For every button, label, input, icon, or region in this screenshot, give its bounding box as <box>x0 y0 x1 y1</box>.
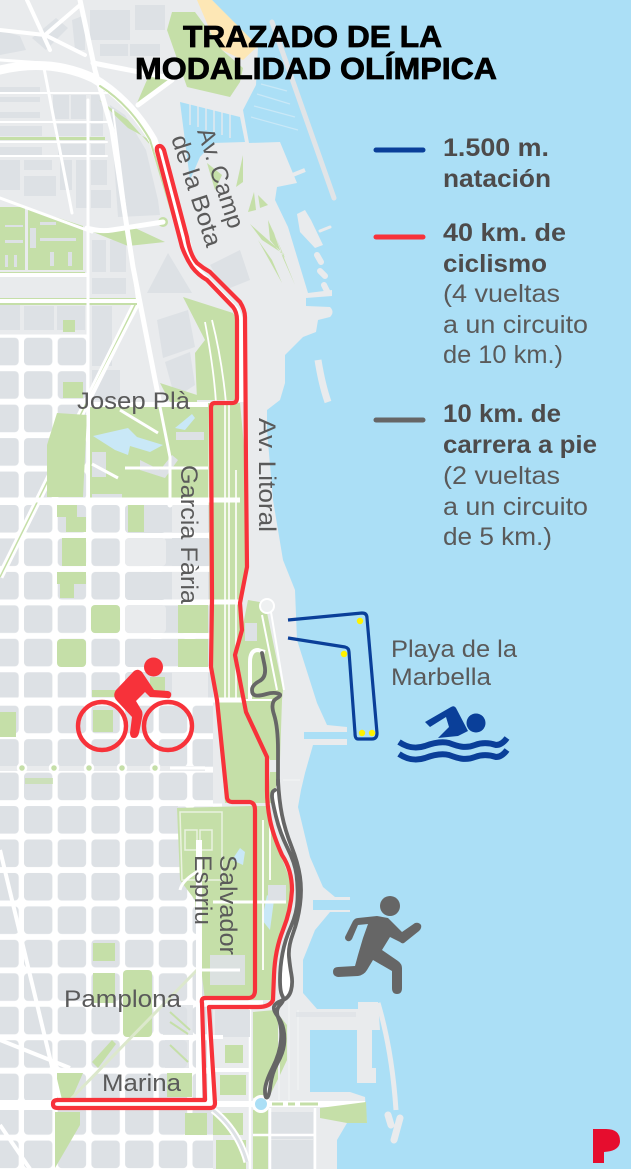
title: MODALIDAD OLÍMPICA <box>135 51 497 86</box>
legend: running <box>376 400 597 551</box>
label: Marina: Marina <box>102 1070 182 1097</box>
logo <box>593 1129 620 1163</box>
legend: cycling: a un circuito <box>443 311 588 339</box>
legend: swimming <box>376 134 551 193</box>
icon: runner <box>333 896 421 994</box>
gray strips over north-west park <box>5 222 76 267</box>
north-west parks <box>0 73 237 497</box>
north-east park <box>167 12 243 97</box>
diagonal and ring circles <box>0 301 247 1169</box>
label: Av. Camp: Av. Camp <box>191 125 249 232</box>
running route <box>252 653 301 1098</box>
label: Av. Litoral: Av. Litoral <box>253 418 280 532</box>
north-west city blocks <box>0 5 250 400</box>
label: Josep Plà: Josep Plà <box>77 388 191 415</box>
legend: running: (2 vueltas <box>443 462 560 490</box>
beach <box>197 0 258 60</box>
legend: running: carrera a pie <box>443 431 597 459</box>
label: de la Bota: de la Bota <box>165 132 227 251</box>
label: Playa de la Marbella: Marbella <box>391 664 492 691</box>
legend: cycling: (4 vueltas <box>443 280 560 308</box>
label: Salvador: Salvador <box>214 855 241 955</box>
title: TRAZADO DE LA <box>183 19 442 54</box>
label: Playa de la Marbella: Playa de la <box>391 636 518 663</box>
legend: swimming: 1.500 m. <box>443 134 549 162</box>
coastal and ring roads <box>0 0 187 505</box>
legend: running: 10 km. de <box>443 400 561 428</box>
buoy markers <box>341 618 375 736</box>
south-east buildings and roads <box>163 840 367 1169</box>
marina basin <box>180 102 245 180</box>
legend: cycling: 40 km. de <box>443 219 566 247</box>
seafront park strip <box>177 403 292 1169</box>
eixample block grid <box>0 336 213 1169</box>
legend: cycling <box>376 219 588 369</box>
swimming route <box>288 613 377 739</box>
label: Pamplona: Pamplona <box>64 986 182 1013</box>
legend: cycling: ciclismo <box>443 250 547 278</box>
label: Espriu: Espriu <box>189 855 216 925</box>
icon: swimmer <box>399 706 507 760</box>
cycling route <box>53 146 292 1108</box>
city street base <box>0 402 213 1169</box>
title <box>135 19 497 86</box>
port green strips <box>207 155 295 285</box>
legend: swimming: natación <box>443 165 551 193</box>
legend: running: de 5 km.) <box>443 523 552 551</box>
green city blocks <box>0 505 246 1169</box>
port details on the water <box>251 22 400 1140</box>
legend: running: a un circuito <box>443 493 588 521</box>
label: Garcia Fària: Garcia Fària <box>175 465 202 605</box>
label: Playa de la Marbella <box>391 636 518 691</box>
land mass <box>0 0 380 1169</box>
legend: cycling: de 10 km.) <box>443 341 563 369</box>
icon: cyclist <box>78 658 192 750</box>
park interior: lakes, buildings and paths <box>0 320 356 1100</box>
